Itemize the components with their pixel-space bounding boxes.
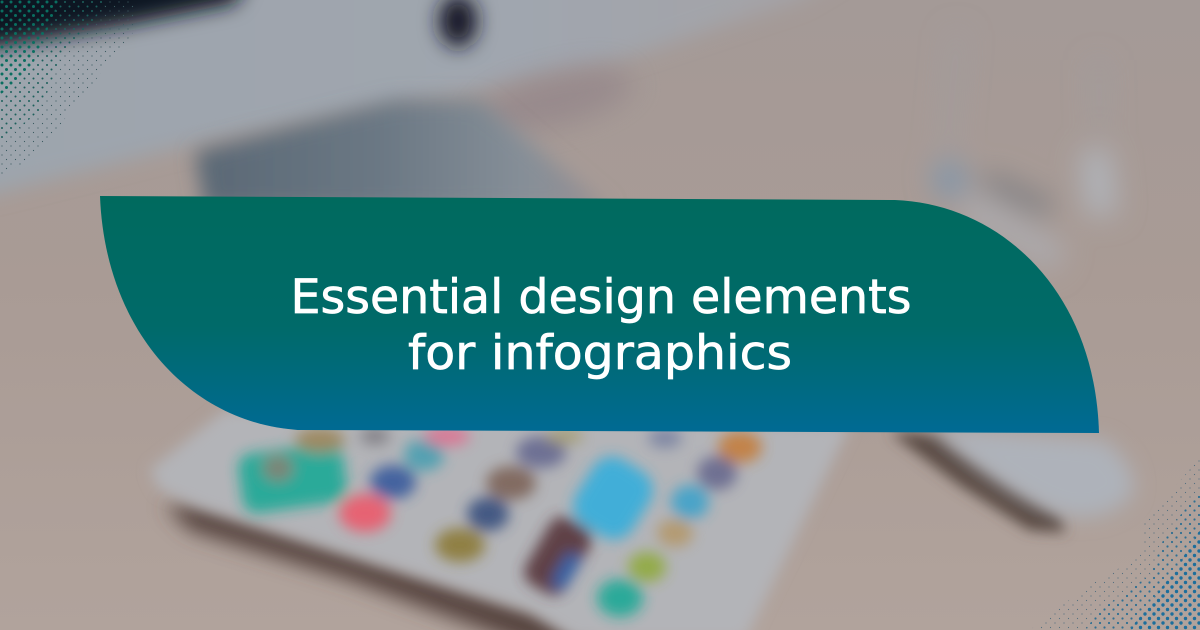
apple logo — [439, 0, 477, 47]
icon cluster column 1 — [295, 426, 470, 532]
title line 1: Essential design elements — [290, 270, 912, 325]
cyan tile — [565, 448, 661, 548]
halftone corner: bottom right — [1030, 458, 1200, 630]
monitor stand — [195, 100, 610, 210]
monitor body — [0, 0, 900, 204]
dark screen edge — [0, 0, 255, 50]
warm desk shadow — [471, 55, 639, 145]
title line 2: for infographics — [408, 326, 792, 381]
blurred mouse — [890, 425, 1133, 532]
glass outline — [945, 30, 958, 170]
halftone corner: top left — [0, 0, 135, 178]
tablet body — [150, 410, 850, 630]
title — [290, 270, 912, 381]
banner — [100, 196, 1099, 433]
tablet shadow — [165, 505, 600, 630]
mouse shadow — [890, 432, 1065, 532]
blurred glass — [945, 30, 1102, 260]
green tile — [236, 441, 349, 515]
blurred monitor — [0, 0, 900, 210]
icon cluster column 3 — [597, 428, 762, 617]
app icons — [236, 426, 762, 617]
icon cluster column 2 — [435, 428, 584, 562]
banner shape — [100, 196, 1099, 433]
blurred tablet — [150, 410, 850, 630]
dark tile — [519, 512, 597, 600]
mouse body — [925, 425, 1133, 518]
